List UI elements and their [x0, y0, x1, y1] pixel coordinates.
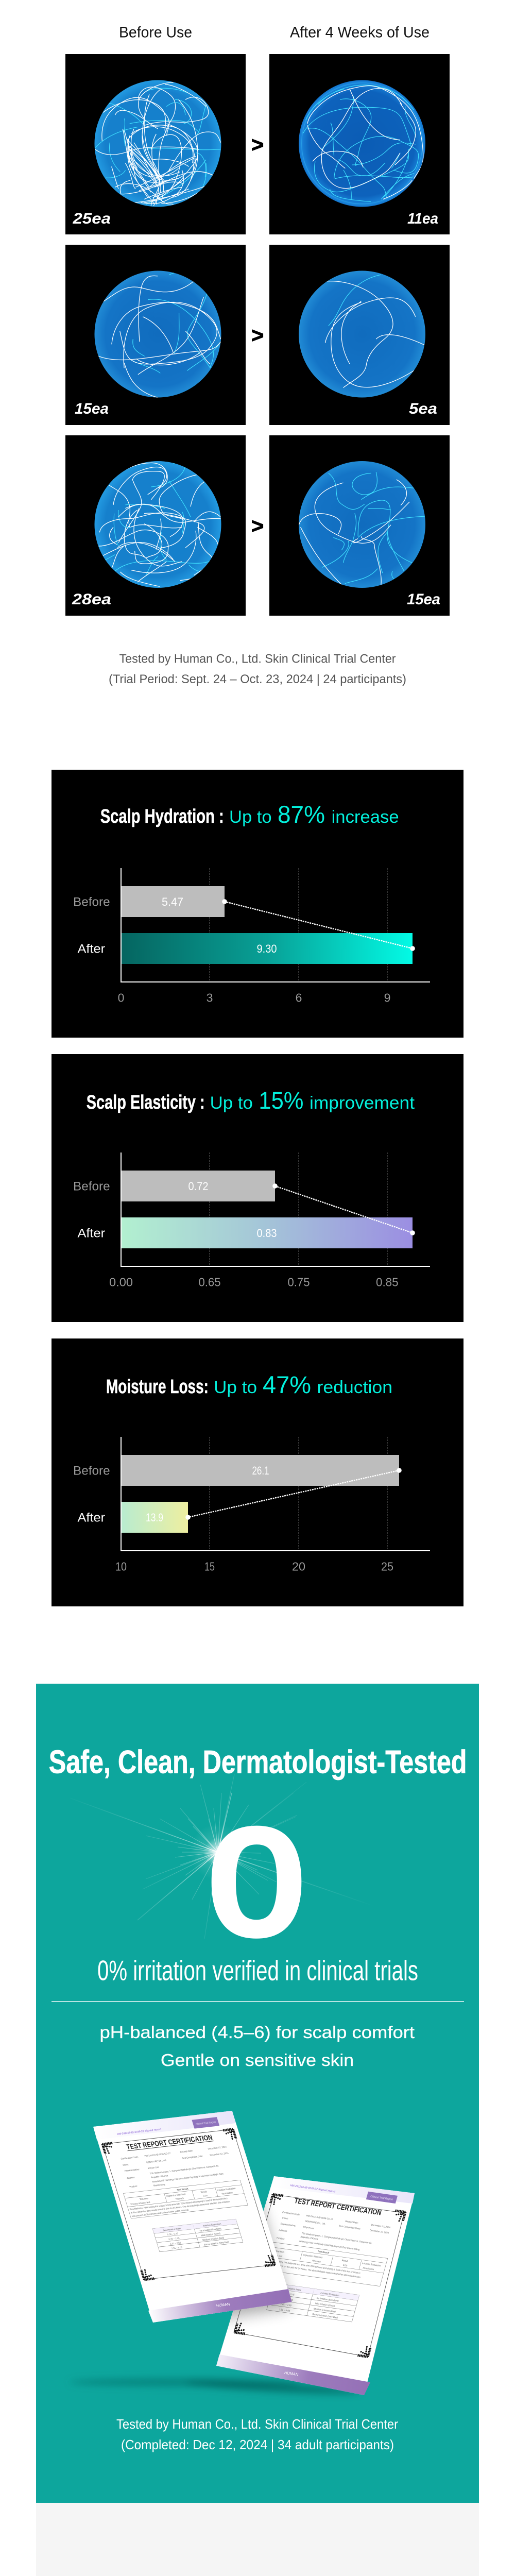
bar chart: elasticity: Before — [73, 1180, 110, 1193]
document: right test report: Kihyun Lee — [303, 2226, 315, 2230]
document: left test report: 0.26 ~ 1.00 — [168, 2236, 180, 2241]
document: right test report: Finn Chamber and attach it on the skin for 24 hours. The dermatologist assessed whether skin irritation was — [256, 2261, 361, 2278]
bar chart: moisture loss — [73, 1437, 430, 1573]
document: right test report: Client: — [282, 2216, 289, 2220]
bar chart: hydration: 5.47 — [162, 895, 183, 908]
arrow: before to after row 1: > — [251, 132, 264, 157]
document: left test report: Address: — [127, 2176, 135, 2179]
bar chart: hydration: 9 — [384, 991, 390, 1005]
document: right test report: Inspection Standard — [303, 2253, 323, 2259]
bar chart: elasticity: 0.72 — [188, 1180, 208, 1193]
hair strands: sample 1 after — [302, 83, 423, 204]
title: moisture loss: reduction — [317, 1378, 392, 1397]
panel: after sample 3 — [269, 435, 450, 616]
count: 11ea: 11ea — [407, 210, 438, 227]
title: scalp elasticity — [87, 1087, 415, 1114]
heading: after 4 weeks of use: After 4 Weeks of Use — [290, 24, 430, 41]
document: left test report: Product: — [129, 2185, 138, 2188]
document: left test report: 1.01 ~ 2.50 — [170, 2241, 181, 2245]
caption: hair test source — [109, 652, 406, 686]
hair strands: sample 3 before — [99, 462, 220, 586]
document: left test report: Medium irritation (Bad) — [202, 2236, 225, 2242]
document: right test report: Republic of Korea — [300, 2235, 318, 2241]
document: left test report: Skin Irritation Index — [162, 2227, 182, 2232]
document: right test report: 0.00 ~ 0.25 — [283, 2292, 295, 2296]
document: right test report: HM-241216-IB-0036-27 Signed report — [289, 2184, 336, 2194]
title: moisture loss: Up to — [214, 1378, 257, 1397]
footer band — [36, 2503, 479, 2576]
bar chart: elasticity: 0.00 — [109, 1276, 133, 1289]
document: right test report: 2.51 ~ 4.00 — [279, 2308, 290, 2312]
document: right test report: No irritation — [363, 2266, 374, 2270]
title: scalp hydration: 87% — [278, 801, 325, 828]
document: right test report: Test Methods: After wiping the subject's test area with 70% ethanol and drying it, load of the test product in — [258, 2257, 361, 2275]
document: right test report: HUMAN — [284, 2370, 299, 2377]
document: right test report: DENATURE Co., Ltd. — [304, 2219, 326, 2225]
title: moisture loss: 47% — [263, 1371, 311, 1398]
document: left test report: Irritation Evaluation — [217, 2187, 236, 2192]
bar chart: moisture loss: 15 — [204, 1560, 215, 1573]
document: left test report: Representative: — [124, 2168, 140, 2172]
panel: after sample 2 — [269, 245, 450, 425]
caption: safety test source: Tested by Human Co., Ltd. Skin Clinical Trial Center — [116, 2416, 398, 2432]
document: left test report: HUMAN — [215, 2302, 231, 2308]
document: right test report: Mild irritation (Good) — [315, 2302, 335, 2308]
document: left test report: HM-241216-IB-0036-CD-27 — [144, 2152, 171, 2158]
document: left test report: 2.51 ~ 4.00 — [171, 2246, 183, 2250]
document: left test report: 0.00 — [203, 2194, 208, 2197]
bar chart: moisture loss: 26.1 — [252, 1464, 269, 1477]
document: left test report: Receipt Date: — [180, 2149, 193, 2154]
bar chart: moisture loss: 13.9 — [146, 1511, 163, 1524]
text: ph balanced: pH-balanced (4.5–6) for scalp comfort — [100, 2023, 415, 2042]
document: right test report: No irritation (Excellent) — [316, 2297, 339, 2302]
arrow: before to after row 3: > — [251, 514, 264, 538]
document: right test report: Primary irritation test — [262, 2252, 283, 2258]
shadow cast on right document — [229, 2198, 297, 2326]
panel: after sample 1 — [269, 54, 450, 234]
text: gentle on sensitive skin: Gentle on sensitive skin — [161, 2050, 354, 2070]
document: left test report: Inspection Standard — [166, 2193, 186, 2197]
count: 5ea: 5ea — [409, 400, 437, 417]
caption: hair test source: (Trial Period: Sept. 24 – Oct. 23, 2024 | 24 participants) — [109, 672, 406, 686]
document: right test report: Test Completion Date: — [339, 2225, 361, 2230]
icon: light starburst — [70, 1774, 377, 1939]
document: left test report: No irritation (Excellent) — [199, 2227, 222, 2232]
hair strands: sample 3 after — [299, 472, 425, 585]
document: left test report: Botanic5756 Hairnergy Hair Loss Relief Synergy Scalp Ampoule Night Care — [152, 2172, 224, 2183]
document: right test report: *Remark — [312, 2259, 321, 2263]
document: left test report: Irritation Evaluation — [202, 2223, 222, 2227]
title: scalp hydration: Scalp Hydration : — [100, 806, 224, 827]
bar chart: elasticity: 0.65 — [199, 1276, 220, 1289]
document: right test report: Skin Irritation Index — [282, 2286, 302, 2292]
document: left test report: Result — [200, 2190, 208, 2194]
bar chart: elasticity: 0.83 — [256, 1227, 277, 1240]
title: scalp hydration: increase — [332, 807, 399, 827]
count: 15ea: 15ea — [75, 400, 109, 417]
caption: hair test source: Tested by Human Co., Ltd. Skin Clinical Trial Center — [119, 652, 396, 666]
document: left test report: 0.00 ~ 0.25 — [167, 2232, 179, 2236]
document: right test report: Irritation Evaluation — [362, 2262, 382, 2267]
document: right test report: Clinical Trial Report — [370, 2195, 393, 2201]
document: left test report: *Remark — [175, 2197, 184, 2200]
panel: scalp hydration chart — [52, 770, 464, 1038]
bar chart: elasticity — [73, 1153, 430, 1289]
bar chart: moisture loss: 20 — [292, 1560, 305, 1573]
document: left test report: Strong irritation (Very Bad) — [203, 2241, 230, 2246]
bar chart: elasticity: After — [77, 1226, 105, 1241]
document: left test report: Kihyun Lee — [148, 2166, 160, 2170]
document: right test report: Test Item — [275, 2249, 285, 2253]
hair strands: sample 2 before — [98, 273, 221, 397]
panel: before sample 3 — [65, 435, 246, 616]
document: right test report — [216, 2176, 415, 2395]
document: left test report: Test Completion Date: — [182, 2155, 203, 2160]
caption: safety test source — [116, 2416, 398, 2452]
document: right test report: 709, Bodeum-gwan, 1, Gangwondaehak-gil, Chuncheon-si, Gangwon-do, — [301, 2232, 372, 2245]
document: right test report: Receipt Date: — [345, 2220, 359, 2224]
title: moisture loss: Moisture Loss: — [106, 1376, 209, 1398]
document: left test report: TEST REPORT CERTIFICATION — [125, 2133, 213, 2151]
heading: before use: Before Use — [119, 24, 192, 41]
arrow: before to after row 2: > — [251, 323, 264, 347]
caption: safety test source: (Completed: Dec 12, 2024 | 34 adult participants) — [121, 2437, 394, 2452]
document: right test report: December 02, 2024 — [371, 2224, 391, 2229]
bar chart: hydration: 3 — [207, 991, 213, 1005]
bar chart: hydration: 0 — [118, 991, 124, 1005]
document: right test report: Strong irritation (Very Bad) — [312, 2313, 338, 2319]
title: scalp elasticity: improvement — [310, 1093, 415, 1113]
hair strands: sample 2 after — [325, 275, 424, 388]
document: right test report: 0.00 — [342, 2264, 348, 2267]
document: right test report: Test Result — [317, 2250, 330, 2254]
document: left test report: Clinical Trial Report — [195, 2121, 217, 2126]
document: right test report: Certification Code: — [282, 2211, 300, 2216]
document: left test report: Client: — [123, 2163, 129, 2166]
document: left test report: was present at 30 minutes and 24 hours after patch removal. — [131, 2208, 190, 2217]
title: scalp hydration: Up to — [229, 807, 272, 827]
document: right test report: 0.26 ~ 1.00 — [282, 2297, 294, 2301]
title: scalp elasticity: 15% — [259, 1087, 303, 1114]
bar chart: moisture loss: After — [77, 1511, 105, 1525]
document: left test report: Test Methods: After wiping the subject's test area with 70% ethanol and drying it, load of the test product — [129, 2197, 228, 2211]
ground shadow — [70, 2378, 360, 2396]
document: left test report: Test Result — [177, 2188, 189, 2191]
title: moisture loss — [106, 1371, 392, 1398]
document: left test report: Certification Code: — [121, 2156, 139, 2160]
panel: safety section — [36, 1684, 479, 2503]
document: right test report: Hairnergy Hair and Scalp Soothing Ampoule Day Care Cooling — [299, 2240, 360, 2251]
document: right test report: Result — [341, 2259, 349, 2262]
bar chart: moisture loss: Before — [73, 1464, 110, 1478]
bar chart: hydration: 6 — [296, 991, 302, 1005]
document: right test report: 1.01 ~ 2.50 — [280, 2303, 292, 2307]
bar chart: elasticity: 0.85 — [376, 1276, 399, 1289]
document: right test report: Product: — [277, 2236, 285, 2240]
bar chart: moisture loss: 10 — [115, 1560, 127, 1573]
document: left test report: Mild irritation (Good) — [201, 2232, 221, 2237]
document: left test report — [93, 2111, 292, 2323]
document: left test report: Republic of Korea — [151, 2174, 168, 2179]
bar chart: hydration: 9.30 — [256, 942, 277, 955]
panel: scalp elasticity chart — [52, 1054, 464, 1322]
document: left test report: December 02, 2024 — [208, 2145, 227, 2150]
document: right test report: Address: — [279, 2229, 288, 2232]
big zero: 0 — [210, 1800, 303, 1965]
bar chart: elasticity: 0.75 — [287, 1276, 310, 1289]
title: scalp hydration — [100, 801, 399, 828]
bar chart: moisture loss: 25 — [381, 1560, 393, 1573]
document: left test report: Primary irritation test — [130, 2201, 151, 2206]
panel: before sample 2 — [65, 245, 246, 425]
document: left test report: December 12, 2024 — [210, 2151, 229, 2157]
document: right test report: TEST REPORT CERTIFICATION — [294, 2196, 383, 2217]
document: left test report: HM-241216-IB-0036-28 Signed report — [117, 2128, 162, 2136]
document: left test report: DENATURE Co., Ltd. — [146, 2159, 167, 2164]
title: scalp elasticity: Scalp Elasticity : — [87, 1092, 205, 1113]
document: left test report: in Finn Chamber and attach it on the skin for 24 hours. The dermatologist assessed whether skin irritation — [130, 2200, 230, 2214]
document: right test report: December 12, 2024 — [369, 2229, 389, 2234]
document: left test report: No irritation — [221, 2191, 233, 2195]
count: 28ea: 28ea — [72, 591, 111, 608]
document: left test report: Test Item — [139, 2197, 149, 2200]
document: right test report: Representative: — [280, 2223, 296, 2227]
panel: moisture loss chart — [52, 1338, 464, 1606]
document: right test report: Irritation Evaluation — [320, 2292, 340, 2297]
hair strands: sample 1 before — [95, 82, 220, 206]
document: left test report: 709, Bodeum-gwan, 1, Gangwondaehak-gil, Chuncheon-si, Gangwon-do, — [149, 2164, 219, 2175]
document: right test report: HM-241216-IB-0036-CD-27 — [306, 2214, 334, 2221]
bar chart: hydration — [73, 868, 430, 1005]
bar chart: hydration: After — [77, 942, 105, 956]
count: 25ea: 25ea — [72, 210, 111, 227]
bar chart: hydration: Before — [73, 895, 110, 909]
count: 15ea: 15ea — [407, 591, 440, 608]
document: left test report: Moisturizing — [153, 2183, 166, 2187]
document: right test report: Medium irritation (Bad) — [313, 2308, 336, 2313]
title: scalp elasticity: Up to — [210, 1093, 253, 1113]
panel: before sample 1 — [65, 54, 246, 234]
